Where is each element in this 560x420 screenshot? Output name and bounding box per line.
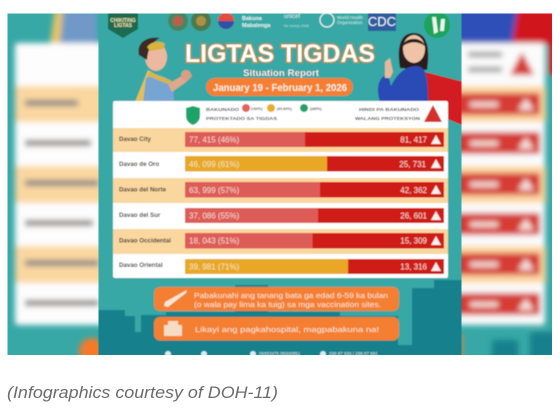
legend: BAKUNADO (206, 107, 239, 113)
logo: campaign badge: LIGTAS (114, 23, 133, 29)
date pill: January 19 - February 1, 2026 (213, 83, 347, 94)
row: Davao City: Davao City (119, 136, 152, 143)
callout: hospital: Likayi ang pagkahospital, magpabakuna na! (195, 325, 379, 334)
footer contacts: 298 87 699 / 298 87 691 (329, 351, 378, 356)
subtitle: Situation Report (243, 68, 319, 78)
row: Davao del Norte (119, 182, 444, 198)
callout: hospital (154, 317, 399, 340)
row: Davao de Oro (119, 156, 444, 172)
row: Davao del Sur (119, 208, 444, 223)
row: Davao del Norte: 63, 999 (57%) (189, 186, 240, 195)
logos: partner organizations: World Health (337, 15, 363, 20)
title: LIGTAS TIGDAS (185, 40, 375, 68)
panel: blurred left background (8, 14, 98, 355)
callout: vaccination: Pabakunahi ang tanang bata ga edad 6-59 ka bulan (194, 293, 388, 300)
legend: HINDI PA BAKUNADO (359, 107, 419, 113)
legend: (60-84%) (277, 107, 293, 111)
row: Davao Occidental: 15, 309 (400, 236, 428, 246)
row: Davao del Sur: 37, 086 (55%) (189, 212, 240, 220)
row: Davao del Norte: Davao del Norte (119, 186, 167, 194)
illustration: girl superhero (378, 33, 464, 126)
skyline background (96, 280, 464, 358)
logos: partner organizations: Bakuna (242, 16, 263, 22)
logos: partner organizations: for every child (284, 23, 309, 28)
legend: (<60%) (251, 107, 263, 111)
logos: partner organizations (168, 11, 450, 38)
row: Davao del Sur: Davao del Sur (119, 212, 161, 219)
row: Davao Occidental (119, 233, 444, 248)
callout: vaccination: (o wala pay lima ka tuig) sa mga vaccination sites. (194, 302, 381, 309)
row: Davao City: 77, 415 (46%) (189, 136, 240, 144)
panel: main infographic poster (96, 11, 464, 358)
logos: partner organizations: unicef (284, 14, 300, 20)
row: Davao Oriental (119, 259, 444, 274)
logos: partner organizations: CDC (368, 14, 396, 29)
icon: syringe (164, 290, 187, 307)
data card (113, 101, 448, 278)
row: Davao Oriental: 13, 316 (400, 262, 428, 272)
row bands (113, 128, 448, 152)
legend (186, 104, 442, 125)
footer contacts (164, 350, 378, 355)
row: Davao de Oro: Davao de Oro (119, 161, 159, 168)
caption: (Infographics courtesy of DOH-11) (7, 384, 278, 402)
row: Davao Occidental: 18, 043 (51%) (189, 236, 240, 246)
icon: green shield (186, 106, 200, 125)
callout: vaccination (154, 287, 399, 311)
row: Davao City (119, 132, 444, 147)
date pill (206, 78, 353, 96)
legend: PROTEKTADO SA TIGDAS (206, 116, 278, 122)
panel: blurred right background (462, 14, 552, 355)
row: Davao City: 81, 417 (400, 136, 428, 144)
row: Davao Oriental: 39, 981 (71%) (189, 262, 240, 272)
row: Davao Occidental: Davao Occidental (119, 238, 171, 244)
row: Davao de Oro: 25, 731 (399, 160, 427, 169)
logo: campaign badge (108, 11, 138, 38)
icon: warning triangle (424, 105, 442, 122)
row: Davao del Sur: 26, 601 (400, 212, 428, 220)
legend: (≥85%) (310, 107, 322, 111)
footer contacts: 09953476 09340951 (259, 351, 301, 356)
icon: hospital (164, 321, 182, 336)
logos: partner organizations: Organization (337, 20, 363, 25)
row: Davao del Norte: 42, 362 (400, 186, 428, 195)
logo: campaign badge: CHIKITING (110, 18, 136, 24)
legend: WALANG PROTEKSYON (355, 116, 421, 122)
logos: partner organizations: Mabalenga (242, 23, 271, 29)
row: Davao de Oro: 46, 099 (61%) (189, 160, 240, 169)
row: Davao Oriental: Davao Oriental (119, 262, 163, 269)
illustration: boy superhero (135, 38, 192, 102)
